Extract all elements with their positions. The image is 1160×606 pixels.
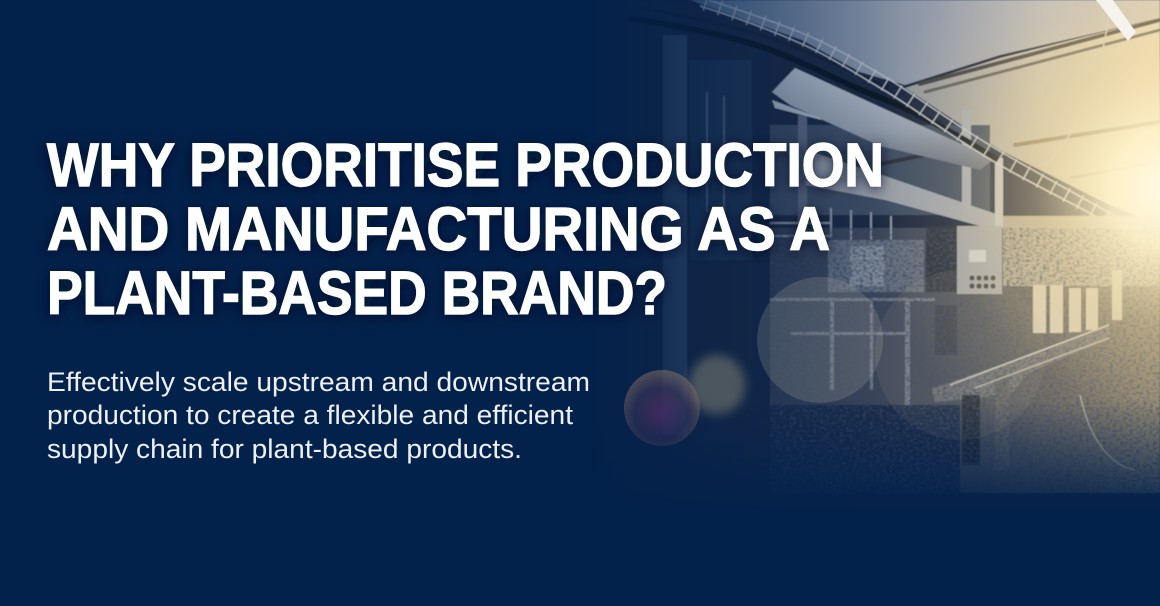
factory photo [580,0,1160,520]
ceiling pipes [920,20,1160,178]
light fixture [1096,0,1136,41]
paper panel [828,240,924,292]
title: PLANT-BASED BRAND? [47,259,667,327]
back wall [905,18,1160,225]
floor machines [770,405,960,495]
subtitle text: Effectively scale upstream and downstream [47,367,590,397]
left pillar [663,35,687,435]
bottom navy fade [580,400,1160,520]
title: WHY PRIORITISE PRODUCTION [47,131,884,199]
dark cabinet [926,226,957,292]
subtitle text: supply chain for plant-based products. [47,434,522,464]
control panel [957,226,1002,294]
ducting beam [772,68,994,170]
subtitle text [47,367,590,464]
back room wall [690,60,752,260]
mid equipment [770,298,957,430]
shelving rails [770,208,1133,248]
right pale machinery [1003,216,1160,286]
ceiling [690,0,1160,85]
machine grit texture [770,228,1160,493]
hanging cable [1045,0,1112,165]
upright near beam end [962,110,971,210]
subtitle text: production to create a flexible and efficient [47,400,574,430]
stray wiring [1080,395,1135,470]
left navy fade [580,0,1160,520]
cable tray [628,18,998,160]
title: AND MANUFACTURING AS A [47,195,830,263]
title [47,131,884,327]
main column [752,52,769,422]
conveyor [931,327,1112,402]
warm light glow [870,0,1160,520]
conveyor rails [950,325,1109,388]
bottles [1033,270,1122,333]
lower machine block [770,228,1160,493]
thin posts [706,92,708,212]
dark interior [580,0,1160,520]
lens flare circles [624,270,1045,446]
light cross beam [806,150,1002,232]
